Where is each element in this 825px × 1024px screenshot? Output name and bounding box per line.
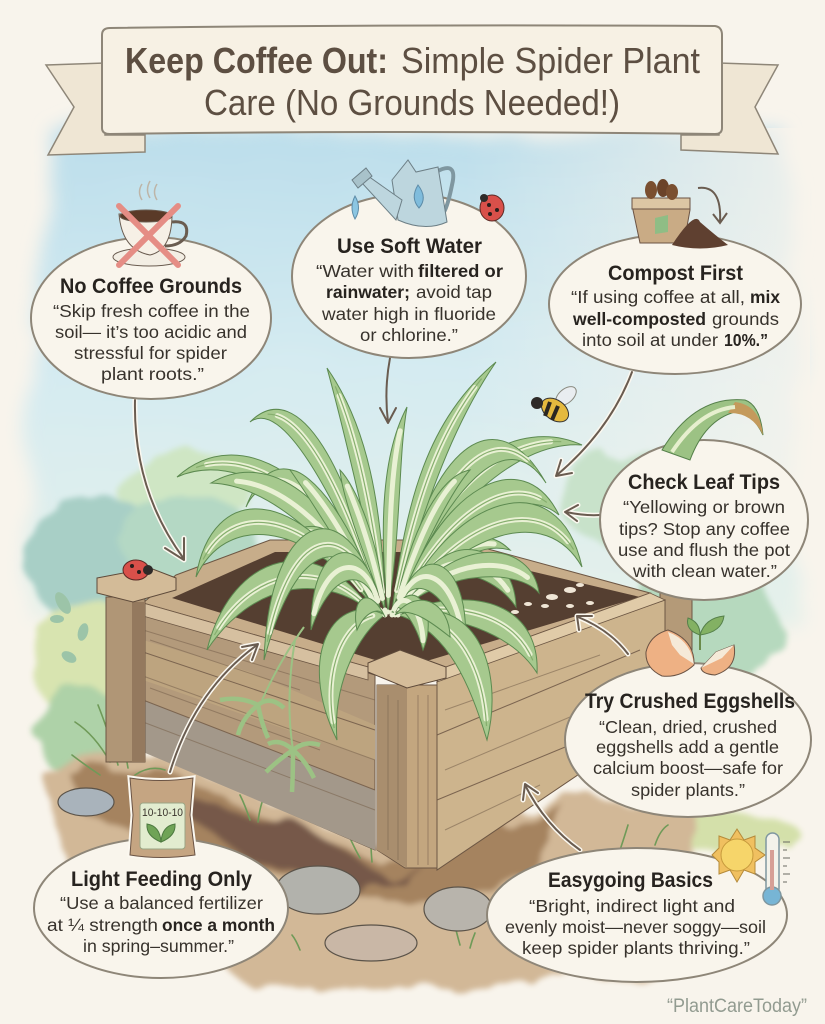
panel: try crushed eggshells	[565, 663, 811, 817]
icon: bee	[531, 383, 580, 427]
body text: “Water with	[316, 261, 414, 281]
body text	[593, 717, 783, 800]
spider plant	[177, 362, 582, 792]
body text: evenly moist—never soggy—soil	[505, 917, 766, 937]
title text: Care (No Grounds Needed!)	[204, 82, 620, 123]
body text: into soil at under	[582, 330, 718, 350]
panel: no coffee grounds	[31, 237, 271, 399]
body text: grounds	[712, 309, 779, 329]
heading: Light Feeding Only	[71, 868, 252, 891]
heading: Compost First	[608, 262, 743, 285]
icon: ladybug	[480, 194, 504, 221]
body text: soil— it’s too acidic and	[55, 322, 247, 342]
body text: eggshells add a gentle	[596, 737, 779, 757]
body text: “Bright, indirect light and	[529, 896, 735, 916]
banner right tail	[681, 63, 778, 154]
background foliage	[25, 450, 800, 859]
arrow: no coffee grounds to soil	[135, 400, 184, 560]
body text: “If using coffee at all,	[571, 287, 745, 307]
right wall	[437, 600, 665, 870]
body text: at ¼ strength	[47, 915, 158, 935]
title banner	[46, 25, 778, 155]
arrow: soft water to plant	[380, 358, 396, 423]
body text: “Use a balanced fertilizer	[60, 893, 263, 913]
title text: Simple Spider Plant	[401, 40, 700, 81]
body text: spider plants.”	[631, 780, 745, 800]
raised wooden bed	[97, 540, 692, 870]
body text: “Clean, dried, crushed	[599, 717, 777, 737]
heading: Easygoing Basics	[548, 869, 713, 892]
decorative sprigs	[50, 590, 90, 665]
body text: calcium boost—safe for	[593, 758, 783, 778]
heading: Use Soft Water	[337, 235, 482, 258]
arrow: compost to soil	[556, 372, 632, 476]
arrow: easygoing basics to bed	[523, 784, 580, 850]
icon: fertilizer bag	[130, 778, 195, 858]
heading: Check Leaf Tips	[628, 471, 780, 494]
centre post	[377, 685, 437, 868]
body text: well-composted	[572, 309, 706, 329]
body text: plant roots.”	[101, 364, 204, 384]
panel: light feeding only	[34, 838, 288, 978]
grass tufts	[72, 705, 668, 950]
body text	[53, 301, 250, 384]
body text: water high in fluoride	[321, 304, 496, 324]
body text	[316, 261, 503, 345]
body text: “Skip fresh coffee in the	[53, 301, 250, 321]
icon: watering can	[352, 160, 453, 227]
arrow: check leaf tips	[565, 505, 600, 521]
panel: easygoing basics	[487, 848, 787, 982]
heading: No Coffee Grounds	[60, 275, 242, 298]
heading: Try Crushed Eggshells	[585, 690, 795, 713]
body text: “Yellowing or brown	[623, 497, 785, 517]
panel: use soft water	[292, 194, 526, 358]
banner body	[102, 25, 722, 134]
icon: crossed-out coffee cup	[113, 181, 187, 266]
body text: avoid tap	[416, 282, 492, 302]
body text: 10%.”	[724, 330, 768, 350]
body text: filtered or	[418, 261, 503, 281]
body text: stressful for spider	[74, 343, 227, 363]
body text: in spring–summer.”	[83, 936, 234, 956]
arrow: light feeding to plant	[170, 644, 258, 772]
body text: keep spider plants thriving.”	[522, 938, 750, 958]
body text	[618, 497, 790, 581]
soil	[172, 552, 640, 660]
icon: fertilizer bag: 10-10-10	[142, 807, 183, 819]
watercolour sky	[25, 128, 810, 620]
back leaves	[177, 362, 582, 612]
front leaves	[311, 553, 537, 740]
left post	[106, 597, 145, 762]
banner left tail	[46, 63, 145, 155]
far right post	[660, 590, 692, 650]
title text	[125, 40, 700, 123]
icon: eggshells and sprout	[646, 616, 735, 676]
icon: browning leaf	[662, 400, 763, 460]
rocks	[58, 788, 492, 961]
crushed eggshell bits	[511, 583, 594, 614]
left wall	[143, 605, 375, 850]
icon: compost bin with grounds	[632, 179, 728, 248]
body text	[47, 893, 275, 956]
icon: sun	[712, 829, 765, 882]
icon: thermometer	[763, 833, 790, 905]
middle filler leaves	[290, 470, 510, 615]
body text: once a month	[162, 915, 275, 935]
body text: tips? Stop any coffee	[619, 519, 790, 539]
body text: mix	[750, 287, 780, 307]
arrow: eggshells to soil	[577, 616, 628, 654]
title text: Keep Coffee Out:	[125, 40, 388, 81]
ground	[40, 705, 700, 990]
body text: with clean water.”	[632, 561, 777, 581]
mid leaves	[196, 479, 582, 660]
body text: or chlorine.”	[360, 325, 458, 345]
credit: “PlantCareToday”	[667, 996, 807, 1017]
panel: compost first	[549, 234, 801, 374]
icon: ladybug on post	[123, 560, 153, 580]
front left rim	[143, 603, 368, 680]
body text: use and flush the pot	[618, 540, 790, 560]
panel: check leaf tips	[600, 440, 808, 600]
front right rim	[437, 593, 665, 682]
body text	[505, 896, 766, 958]
back rim	[143, 540, 650, 667]
body text	[571, 287, 780, 350]
body text: rainwater;	[326, 282, 410, 302]
runner stems and plantlets	[220, 627, 320, 792]
